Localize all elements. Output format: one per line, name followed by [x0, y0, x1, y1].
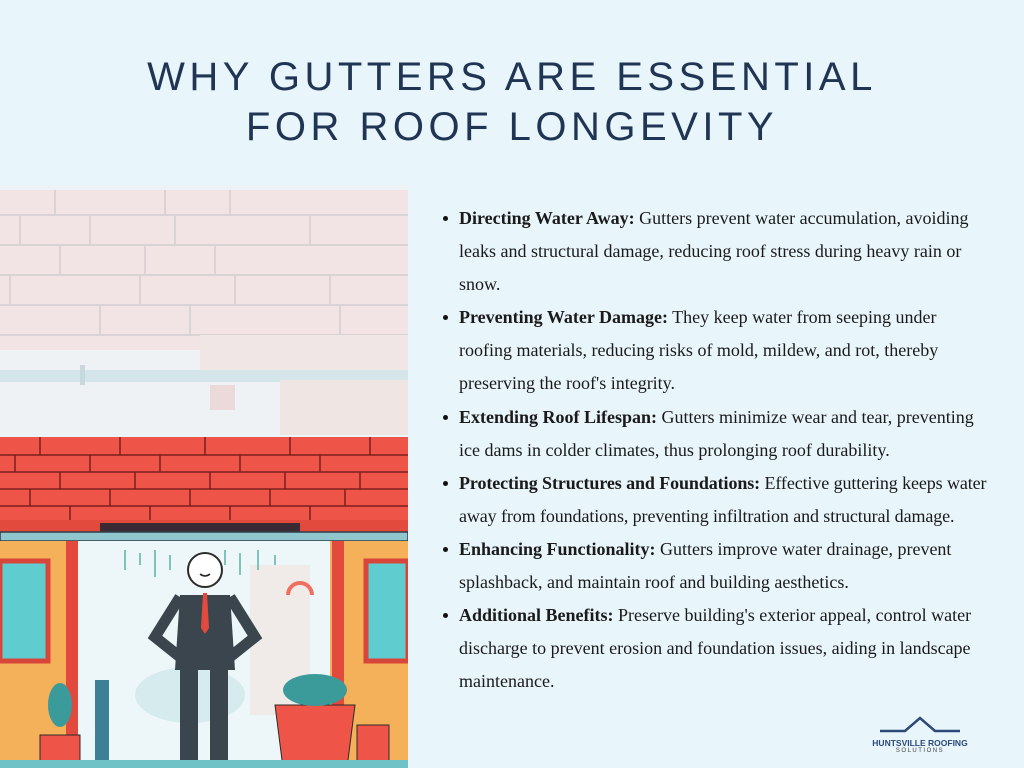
walls: [0, 541, 408, 768]
title: WHY GUTTERS ARE ESSENTIAL: [147, 55, 877, 99]
illustration: house with gutters: [0, 190, 408, 768]
gutter: [0, 532, 408, 541]
logo: [872, 716, 968, 754]
title: [147, 55, 877, 149]
logo: SOLUTIONS: [896, 748, 944, 754]
item 6: Additional Benefits: Preserve building's exterior appeal, control water discharge to prevent erosion and foundation issues, aiding in landscape maintenance.: [459, 605, 971, 691]
item 1: Directing Water Away: Gutters prevent water accumulation, avoiding leaks and structural damage, reducing roof stress during heavy rain or snow.: [459, 208, 969, 294]
logo: HUNTSVILLE ROOFING: [872, 738, 968, 748]
item 2: Preventing Water Damage: They keep water from seeping under roofing materials, reducing risks of mold, mildew, and rot, thereby preserving the roof's integrity.: [459, 307, 938, 393]
sun icon: [288, 583, 312, 595]
item 5: Enhancing Functionality: Gutters improve water drainage, prevent splashback, and maintain roof and building aesthetics.: [459, 539, 951, 592]
item 3: Extending Roof Lifespan: Gutters minimize wear and tear, preventing ice dams in colder climates, thus prolonging roof durability.: [459, 407, 974, 460]
faded background roof: [0, 185, 408, 435]
man: [155, 553, 255, 765]
title: FOR ROOF LONGEVITY: [246, 105, 778, 149]
item 4: Protecting Structures and Foundations: Effective guttering keeps water away from foundations, preventing infiltration and structural damage.: [459, 473, 986, 526]
red roof: [0, 437, 408, 533]
plants: [0, 674, 408, 768]
bullet list: [443, 208, 986, 691]
rain: [125, 550, 275, 577]
windows: [0, 561, 408, 661]
